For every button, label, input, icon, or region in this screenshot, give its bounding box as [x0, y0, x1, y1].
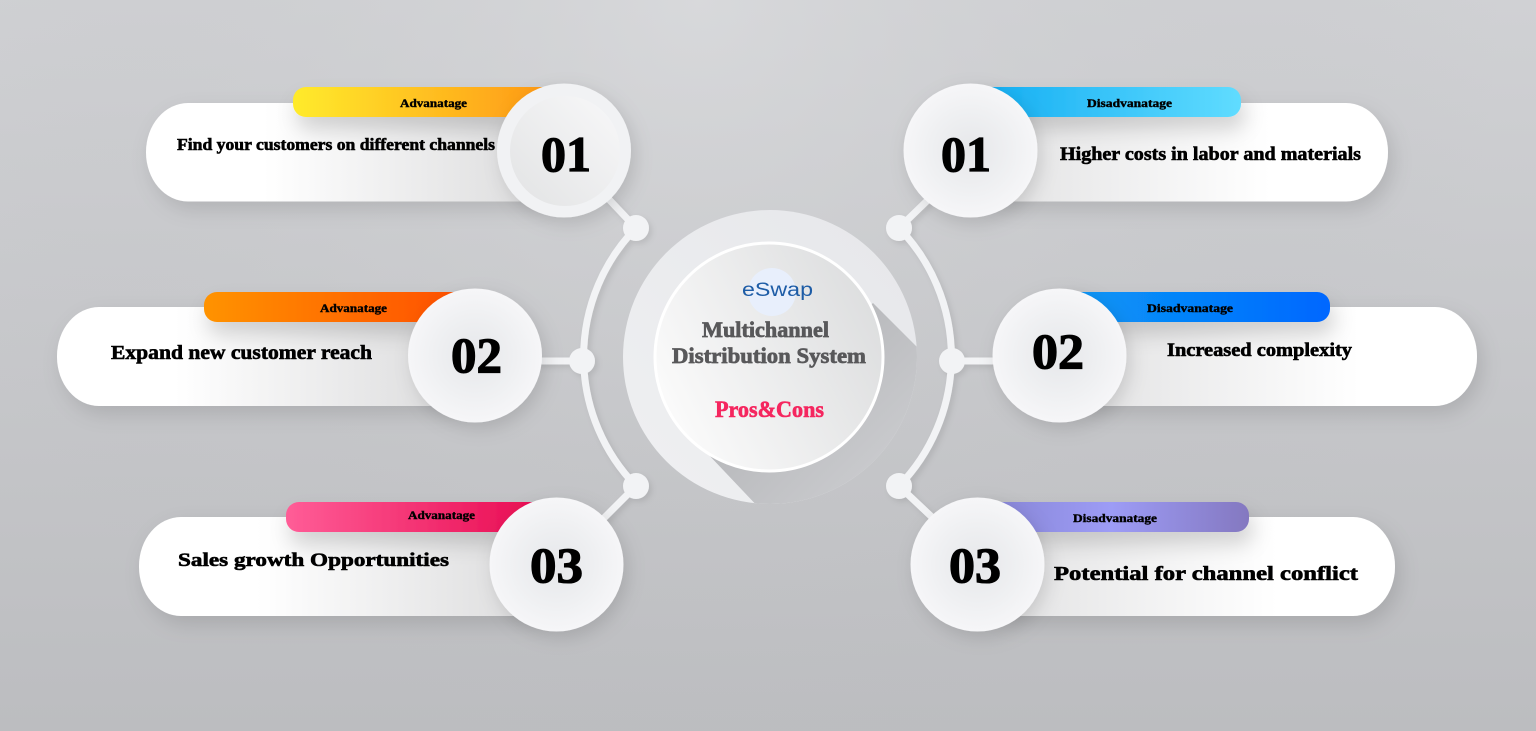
number: 03: [530, 537, 583, 593]
tag: [966, 87, 1241, 117]
tag: [1055, 292, 1330, 322]
connector network: arcs, spokes and nodes: [535, 192, 1000, 522]
tag label: Disadvanatage: [1147, 301, 1234, 315]
tag label: Advanatage: [320, 301, 388, 315]
tag label: Advanatage: [400, 96, 468, 110]
tag: [293, 87, 568, 117]
hub subtitle: Pros&Cons: [715, 397, 824, 422]
panel: disadvantage 01: [904, 84, 1388, 218]
hub inner disc: [655, 243, 883, 471]
panel: advantage 01: [146, 84, 631, 218]
panel: advantage 03: [139, 498, 624, 632]
card text: Higher costs in labor and materials: [1060, 144, 1361, 165]
tag label: Advanatage: [408, 508, 476, 522]
card: [1057, 307, 1477, 406]
number: 01: [541, 126, 591, 182]
panel: disadvantage 03: [910, 498, 1395, 632]
tag: [204, 292, 479, 322]
tag: [286, 502, 551, 532]
hub title: [672, 317, 866, 368]
card: [968, 103, 1388, 202]
hub outer ring: [623, 210, 917, 504]
number: 03: [949, 537, 1001, 593]
logo: eSwap: eSwap: [742, 280, 813, 301]
number disc: [490, 498, 624, 632]
card text: Increased complexity: [1167, 340, 1353, 361]
hub long shadow: [710, 303, 917, 504]
logo: eSwap: [742, 268, 813, 316]
number disc: [910, 498, 1044, 632]
hub title: Multichannel: [702, 317, 829, 342]
number: 01: [941, 126, 991, 182]
central hub: [623, 210, 916, 504]
card: [139, 517, 559, 616]
number disc: [904, 84, 1038, 218]
number: 02: [451, 327, 502, 383]
card text: Find your customers on different channels: [177, 135, 495, 154]
card: [146, 103, 566, 202]
card text: Potential for channel conflict: [1054, 563, 1358, 585]
hub title: Distribution System: [672, 343, 866, 368]
panel: advantage 02: [57, 288, 542, 422]
number disc: [408, 288, 542, 422]
tag: [974, 502, 1249, 532]
panel: disadvantage 02: [992, 288, 1477, 422]
number disc: [992, 288, 1126, 422]
tag label: Disadvanatage: [1073, 511, 1158, 525]
card text: Expand new customer reach: [111, 342, 372, 364]
card: [57, 307, 477, 406]
number disc: [497, 84, 631, 218]
tag label: Disadvanatage: [1087, 96, 1173, 110]
card: [975, 517, 1395, 616]
number: 02: [1032, 323, 1084, 379]
card text: Sales growth Opportunities: [178, 550, 449, 571]
